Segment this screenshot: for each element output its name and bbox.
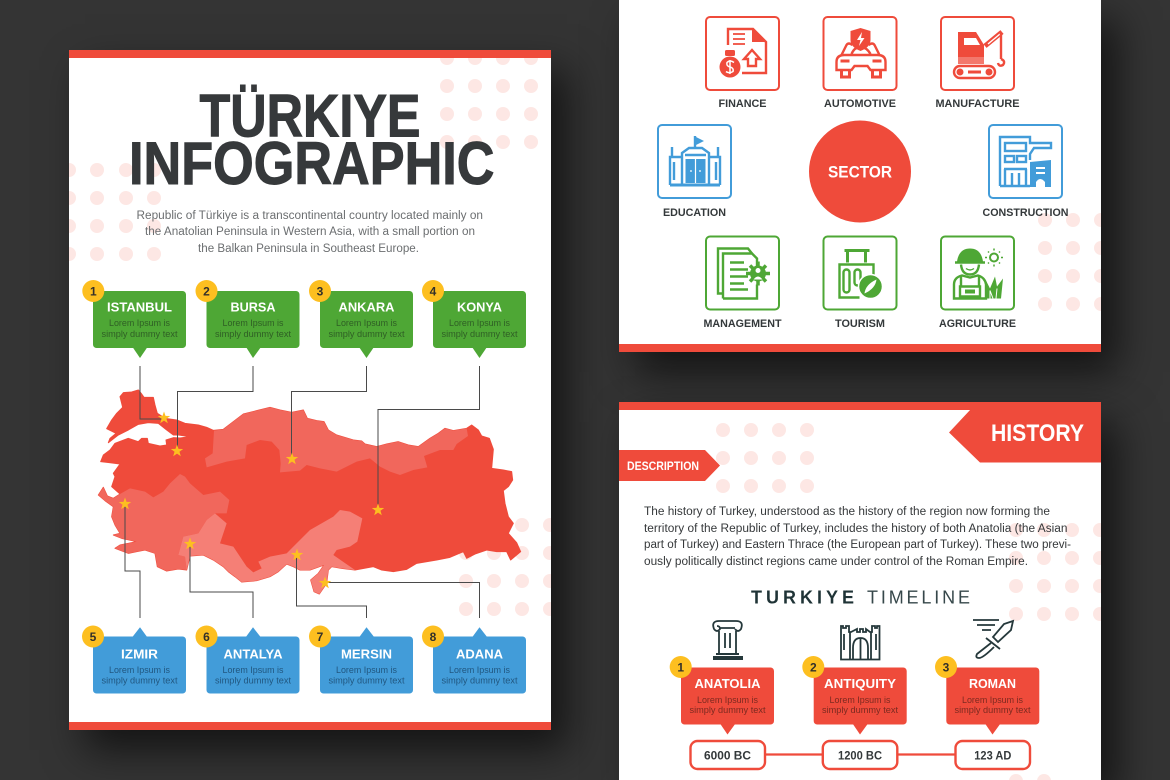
panel: sectors bbox=[619, 0, 1108, 352]
map of Türkiye bbox=[98, 390, 521, 594]
callout: Konya: Lorem Ipsum is bbox=[449, 318, 510, 329]
sector hub circle bbox=[809, 120, 911, 222]
history text: The history of Turkey, understood as the history of the region now forming the bbox=[644, 506, 1050, 518]
timeline card: Antiquity: ANTIQUITY bbox=[824, 676, 896, 691]
sector: agriculture bbox=[939, 236, 1016, 330]
callout: Konya bbox=[422, 280, 526, 358]
sector: education: EDUCATION bbox=[663, 207, 726, 219]
icon: column bbox=[713, 621, 743, 660]
sector: automotive bbox=[824, 17, 896, 110]
callout: Mersin: 7 bbox=[317, 630, 324, 644]
timeline card: Anatolia: 1 bbox=[677, 660, 684, 674]
connector lines bbox=[125, 366, 480, 618]
callout: Istanbul: simply dummy text bbox=[102, 329, 178, 340]
callout: Bursa: simply dummy text bbox=[215, 329, 291, 340]
sector: management: MANAGEMENT bbox=[704, 318, 782, 330]
timeline heading: TURKIYE bbox=[751, 588, 854, 608]
callout: Bursa: 2 bbox=[203, 284, 210, 298]
callout: Antalya: ANTALYA bbox=[224, 646, 283, 661]
map location stars bbox=[119, 412, 384, 588]
callout: Bursa: BURSA bbox=[230, 300, 276, 315]
timeline card: Roman: Lorem Ipsum is bbox=[962, 695, 1023, 706]
intro text: Republic of Türkiye is a transcontinental country located mainly on bbox=[136, 210, 483, 222]
timeline card: Anatolia bbox=[670, 656, 774, 734]
callout: Adana: 8 bbox=[430, 630, 437, 644]
callout: Konya: KONYA bbox=[457, 300, 503, 315]
date: 6000 BC bbox=[690, 741, 765, 769]
callout: Ankara: ANKARA bbox=[338, 300, 395, 315]
callout: Antalya: 6 bbox=[203, 630, 210, 644]
date: 1200 BC: 1200 BC bbox=[838, 748, 882, 762]
callout: Mersin bbox=[309, 626, 413, 694]
timeline card: Anatolia: Lorem Ipsum is bbox=[697, 695, 758, 706]
history text bbox=[644, 506, 1071, 568]
history text: territory of the Republic of Turkey, includes the history of both Anatolia (the Asian bbox=[644, 523, 1068, 535]
timeline card: Anatolia: ANATOLIA bbox=[694, 676, 761, 691]
callout: Adana: simply dummy text bbox=[442, 676, 518, 686]
sector: construction bbox=[982, 125, 1069, 219]
title bbox=[129, 82, 494, 197]
timeline card: Antiquity: simply dummy text bbox=[822, 705, 898, 716]
callout: Adana: Lorem Ipsum is bbox=[449, 665, 510, 676]
callout: Izmir: 5 bbox=[90, 630, 97, 644]
callout: Antalya bbox=[196, 626, 300, 694]
callout: Mersin: MERSIN bbox=[341, 646, 392, 661]
timeline card: Antiquity: 2 bbox=[810, 660, 817, 674]
callout: Adana: ADANA bbox=[456, 646, 504, 661]
timeline heading bbox=[751, 588, 970, 608]
timeline heading: TIMELINE bbox=[867, 588, 970, 608]
timeline card: Roman: 3 bbox=[943, 660, 950, 674]
sector: finance bbox=[706, 17, 779, 110]
callout: Konya: 4 bbox=[430, 284, 437, 298]
history text: part of Turkey) and Eastern Thrace (the European part of Turkey). These two previ- bbox=[644, 539, 1071, 551]
sector: automotive: AUTOMOTIVE bbox=[824, 98, 896, 110]
timeline card: Roman bbox=[935, 656, 1039, 734]
callout: Istanbul: 1 bbox=[90, 284, 97, 298]
callout: Ankara: Lorem Ipsum is bbox=[336, 318, 397, 329]
timeline connector bbox=[765, 753, 955, 756]
sector: manufacture bbox=[936, 17, 1020, 110]
history text: ously politically distinct regions came under control of the Roman Empire. bbox=[644, 556, 1028, 568]
sector: agriculture: AGRICULTURE bbox=[939, 318, 1016, 330]
callout: Bursa bbox=[196, 280, 300, 358]
callout: Mersin: simply dummy text bbox=[328, 676, 405, 686]
sector hub circle: SECTOR bbox=[828, 162, 892, 182]
callout: Antalya: simply dummy text bbox=[215, 676, 291, 686]
callout: Ankara bbox=[309, 280, 413, 358]
callout: Antalya: Lorem Ipsum is bbox=[222, 665, 284, 676]
icon: sword bbox=[973, 620, 1013, 658]
intro text: the Balkan Peninsula in Southeast Europe. bbox=[198, 243, 419, 255]
description tag: DESCRIPTION bbox=[627, 459, 699, 473]
timeline card: Roman: ROMAN bbox=[969, 676, 1016, 691]
date: 6000 BC: 6000 BC bbox=[704, 748, 751, 762]
callout: Istanbul: Lorem Ipsum is bbox=[109, 318, 170, 329]
callout: Ankara: 3 bbox=[317, 284, 324, 298]
intro text bbox=[136, 210, 483, 255]
sector: education bbox=[658, 125, 731, 219]
history heading tag: HISTORY bbox=[991, 420, 1084, 447]
callout: Adana bbox=[422, 626, 526, 694]
icon: castle bbox=[841, 626, 880, 660]
callout: Bursa: Lorem Ipsum is bbox=[222, 318, 284, 329]
history heading tag bbox=[949, 409, 1101, 462]
timeline card: Roman: simply dummy text bbox=[954, 705, 1031, 716]
sector: tourism bbox=[824, 236, 896, 330]
title: TÜRKIYE bbox=[200, 82, 420, 150]
callout: Izmir bbox=[82, 626, 186, 694]
panel: history bbox=[619, 402, 1107, 780]
callout: Mersin: Lorem Ipsum is bbox=[336, 665, 397, 676]
timeline card: Anatolia: simply dummy text bbox=[690, 705, 766, 716]
intro text: the Anatolian Peninsula in Western Asia, with a small portion on bbox=[145, 226, 475, 238]
description tag bbox=[619, 450, 720, 481]
sector: management bbox=[704, 236, 782, 330]
sector: tourism: TOURISM bbox=[835, 318, 885, 330]
sector: finance: FINANCE bbox=[718, 98, 766, 110]
callout: Konya: simply dummy text bbox=[442, 329, 518, 340]
sector: construction: CONSTRUCTION bbox=[982, 207, 1069, 219]
panel: Türkiye map infographic bbox=[62, 50, 557, 730]
title: INFOGRAPHIC bbox=[129, 130, 494, 197]
sector: manufacture: MANUFACTURE bbox=[936, 98, 1020, 110]
callout: Izmir: simply dummy text bbox=[102, 676, 178, 686]
callout: Istanbul bbox=[82, 280, 186, 358]
timeline card: Antiquity bbox=[802, 656, 907, 734]
callout: Izmir: IZMIR bbox=[121, 646, 159, 661]
date: 123 AD: 123 AD bbox=[974, 748, 1012, 762]
callout: Izmir: Lorem Ipsum is bbox=[109, 665, 170, 676]
timeline card: Antiquity: Lorem Ipsum is bbox=[830, 695, 891, 706]
date: 1200 BC bbox=[823, 741, 897, 769]
date: 123 AD bbox=[956, 741, 1030, 769]
callout: Istanbul: ISTANBUL bbox=[107, 300, 172, 315]
callout: Ankara: simply dummy text bbox=[328, 329, 405, 340]
